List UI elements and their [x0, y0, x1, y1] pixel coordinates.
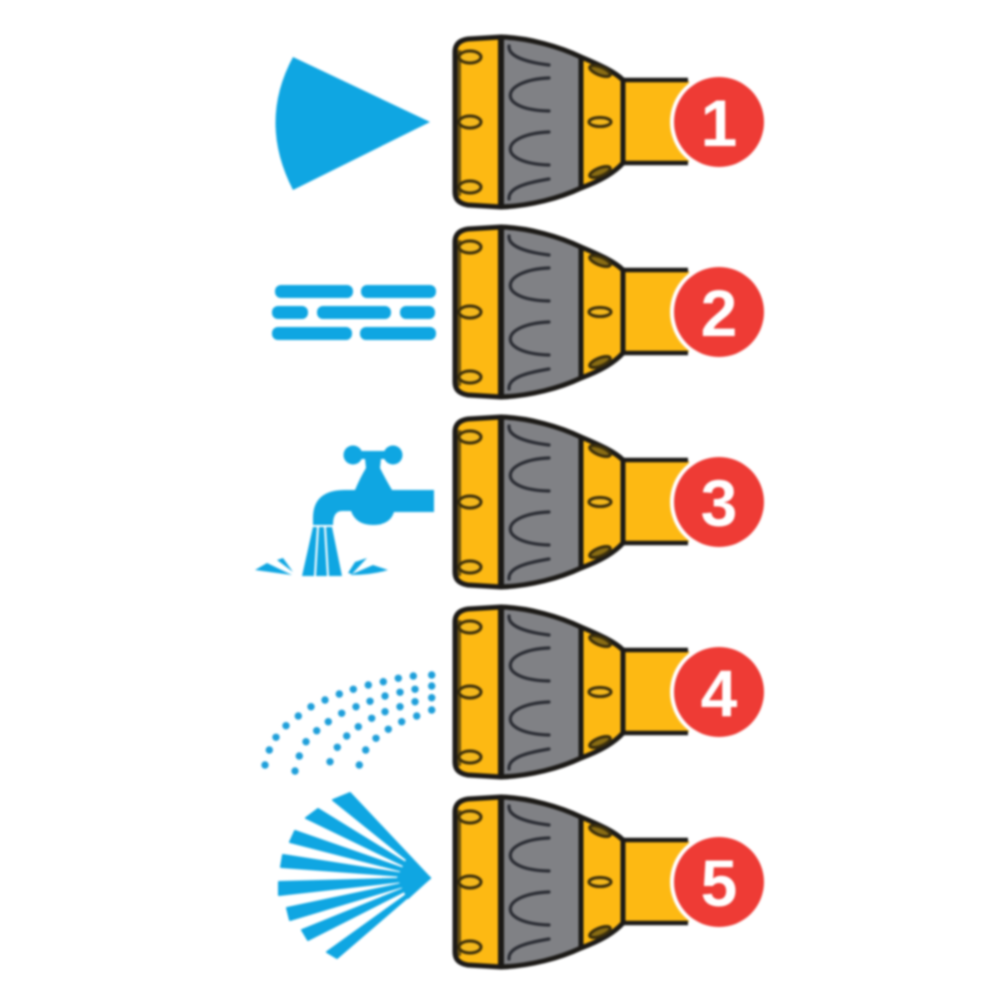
icon: solid cone jet	[276, 57, 430, 190]
icon: tap with water stream	[255, 446, 434, 576]
nozzle 2 with number badge	[455, 226, 768, 398]
nozzle 3 with number badge	[455, 416, 768, 588]
nozzle 5 with number badge	[455, 796, 768, 968]
nozzle 1 with number badge: 1	[701, 86, 737, 160]
nozzle 4 with number badge	[455, 606, 768, 778]
arc 3	[326, 694, 435, 765]
nozzle 1 with number badge	[455, 36, 768, 208]
nozzle 5 with number badge: 5	[701, 846, 737, 920]
icon: dashed arcing shower	[261, 671, 435, 775]
nozzle 2 with number badge: 2	[701, 276, 737, 350]
nozzle 4 with number badge: 4	[701, 656, 738, 730]
icon: wide fan spray	[279, 793, 430, 958]
arc 1	[261, 671, 435, 769]
arc 4	[356, 706, 435, 769]
nozzle 3 with number badge: 3	[701, 466, 737, 540]
icon: flat brick-pattern spray	[272, 285, 436, 340]
arc 2	[291, 682, 435, 775]
